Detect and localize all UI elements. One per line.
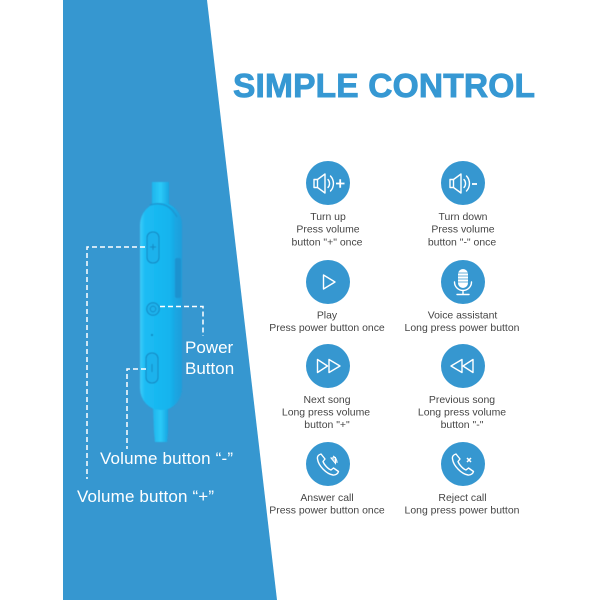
dashed leader: power [160, 306, 203, 336]
text: reject call: Long press power button [405, 506, 520, 516]
earphone remote control [140, 182, 182, 442]
label: volume minus: Volume button “-” [100, 449, 233, 468]
item: reject call [405, 442, 520, 516]
top bevel [150, 204, 177, 217]
power button [147, 303, 159, 315]
text: previous song: button "-" [441, 420, 484, 431]
text: voice assistant: Voice assistant [428, 310, 497, 322]
blue side panel [63, 0, 277, 600]
label: power button: Button [185, 359, 234, 378]
item: next song [282, 344, 370, 431]
text: next song: button "+" [304, 420, 350, 431]
text: turn up: button "+" once [292, 238, 363, 249]
remote body [140, 203, 182, 410]
text: turn down: button "-" once [428, 238, 496, 249]
text: reject call: Reject call [438, 493, 487, 504]
text: answer call: Answer call [300, 493, 354, 504]
text: turn down: Turn down [439, 212, 488, 223]
item: play [269, 260, 385, 334]
icon: fast forward [306, 344, 350, 388]
icon: phone with signal [306, 442, 350, 486]
icon: rewind [441, 344, 485, 388]
icon: phone with cross [441, 442, 485, 486]
item: previous song [418, 344, 506, 431]
bottom cable [153, 408, 168, 442]
icon: speaker plus [306, 161, 350, 205]
icon: microphone [441, 260, 485, 304]
text: voice assistant: Long press power button [405, 323, 520, 334]
icon: speaker minus [441, 161, 485, 205]
dashed leader: volume minus [127, 369, 146, 449]
label: power button: Power [185, 338, 233, 357]
item: turn down [428, 161, 496, 249]
text: turn up: Press volume [296, 225, 360, 236]
title: SIMPLE CONTROL [233, 68, 535, 105]
text: play: Press power button once [269, 323, 385, 334]
volume minus button [146, 353, 158, 383]
text: next song: Long press volume [282, 408, 370, 418]
text: play: Play [317, 310, 338, 322]
icon: play [306, 260, 350, 304]
label: volume plus: Volume button “+” [77, 487, 214, 506]
top cable [152, 182, 169, 206]
volume plus button [147, 232, 159, 263]
microphone hole [151, 334, 153, 336]
item: turn up [292, 161, 363, 249]
text: previous song: Previous song [429, 395, 495, 406]
item: voice assistant [405, 260, 520, 334]
text: turn down: Press volume [431, 225, 495, 236]
item: answer call [269, 442, 385, 516]
text: answer call: Press power button once [269, 506, 385, 516]
side switch [175, 258, 181, 298]
text: turn up: Turn up [310, 212, 346, 223]
dashed leader: volume plus [87, 247, 145, 479]
text: previous song: Long press volume [418, 408, 506, 418]
text: next song: Next song [304, 395, 351, 406]
